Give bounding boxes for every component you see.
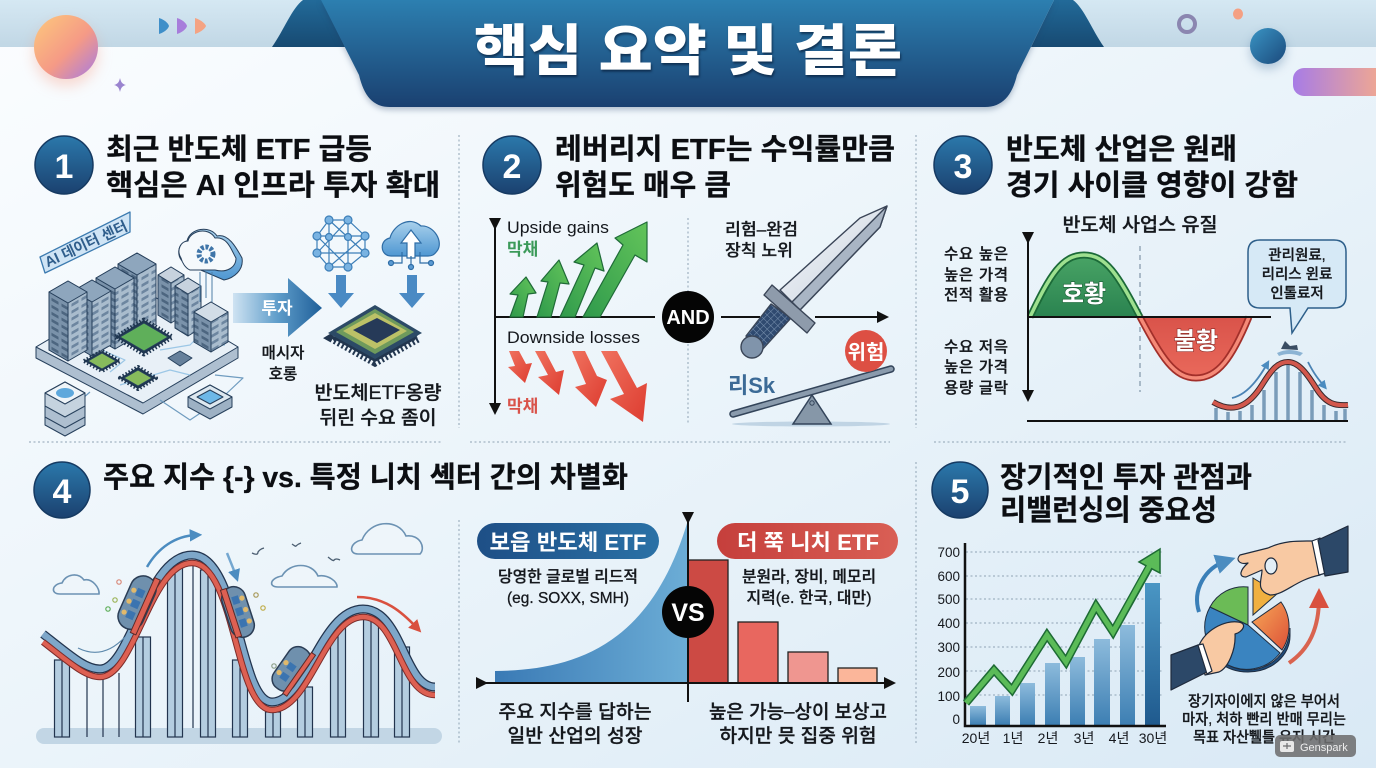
heading 1: 최근 반도체 ETF 급등 (106, 133, 372, 166)
number badge 3 (934, 136, 992, 194)
coaster car 3 (267, 641, 316, 696)
heading 1 (106, 133, 440, 202)
heading 3: 경기 사이클 영향이 강함 (1006, 169, 1298, 202)
heading 4: 주요 지수 {-} vs. 특정 니치 셱터 간의 차별화 (103, 461, 628, 494)
risk seesaw: 위험 (848, 341, 884, 364)
demand labels: 전적 활용 (944, 286, 1008, 304)
invest arrow (233, 278, 322, 337)
watermark badge: Genspark (1300, 742, 1348, 754)
rebalance caption (1182, 693, 1346, 746)
heading 3 (1006, 133, 1298, 202)
label: upside 막채: 막채 (507, 240, 538, 259)
demand labels: 수요 높은 (944, 245, 1008, 263)
x axis labels: 1년 (1003, 730, 1023, 746)
data center illustration (36, 212, 243, 436)
callout bubble: 관리원료, (1268, 247, 1326, 264)
caption: chip demand: 반도체ETF옹량 (314, 382, 442, 404)
label: downside losses: Downside losses (507, 328, 640, 347)
axes (965, 543, 1166, 726)
left summary: 주요 지수를 답하는 (498, 701, 652, 723)
blue pill label (477, 523, 659, 559)
x axis labels: 30년 (1139, 730, 1167, 746)
caption: chip demand: 뒤린 수요 좀이 (320, 407, 436, 429)
y axis labels: 400 (937, 616, 960, 631)
x axis labels (962, 730, 1167, 746)
decorative sparkle (114, 78, 126, 92)
confetti dots (106, 580, 276, 668)
VS badge (662, 586, 714, 638)
number badge 5 (932, 462, 988, 518)
y axis labels: 500 (937, 592, 960, 607)
semiconductor chip (328, 305, 422, 362)
broad ETF description: 당영한 글로벌 리드적 (498, 568, 638, 586)
label: upside gains: Upside gains (507, 218, 609, 237)
decorative orb (34, 15, 98, 79)
title ribbon (272, 0, 1104, 107)
platform (36, 287, 238, 414)
supports (54, 563, 410, 737)
birds (252, 543, 340, 561)
niche ETF description (742, 568, 876, 607)
y axis labels: 700 (937, 545, 960, 560)
rebalance illustration (1171, 526, 1348, 746)
coaster track (43, 555, 435, 710)
slump area (1140, 317, 1251, 380)
risk seesaw: 리Sk (728, 373, 776, 398)
decorative drop (1233, 8, 1243, 20)
heading 2: 위험도 매우 큼 (555, 169, 731, 202)
boom area (1028, 253, 1140, 317)
red pill label (717, 523, 898, 559)
down arrows (328, 275, 425, 308)
red pill label: 더 쭉 니치 ETF (737, 530, 879, 555)
x axis labels: 20년 (962, 730, 990, 746)
left hand (1171, 622, 1244, 690)
axes (495, 226, 885, 411)
coaster car 1 (113, 570, 161, 635)
storage stack (45, 382, 85, 436)
caption: 매시자 호롱 (262, 344, 304, 383)
cloud upload icon (382, 221, 439, 270)
broad ETF description: (eg. SOXX, SMH) (507, 590, 629, 607)
y axis labels: 200 (937, 665, 960, 680)
y axis labels: 0 (952, 712, 960, 727)
panel 5: long term view (932, 461, 1348, 746)
niche bars (688, 560, 877, 683)
number badge 2 (483, 136, 541, 194)
chart axes (484, 520, 892, 702)
niche ETF description: 분원라, 장비, 메모리 (742, 568, 876, 586)
y axis labels: 600 (937, 569, 960, 584)
cycle chart (1027, 240, 1348, 421)
number badge 1: 1 (55, 148, 73, 186)
right summary (709, 701, 887, 747)
decorative blue ball (1250, 28, 1286, 64)
heading 5: 리밸런싱의 중요성 (1000, 494, 1217, 527)
right summary: 하지만 믓 집중 위험 (720, 725, 876, 747)
y axis labels: 300 (937, 640, 960, 655)
heading 5: 장기적인 투자 관점과 (1000, 461, 1252, 494)
rebalance caption: 마자, 처하 빤리 반매 무리는 (1182, 711, 1346, 728)
VS badge: VS (671, 599, 705, 627)
heading 2 (555, 133, 895, 202)
label: 리험-완검: 리험–완검 (725, 220, 798, 239)
callout bubble (1248, 240, 1346, 333)
ground shadow (36, 728, 442, 744)
blue pill label: 보읍 반도체 ETF (490, 530, 646, 555)
panel 4: index vs niche (34, 461, 898, 747)
panel 3: semiconductor cycle (934, 133, 1348, 421)
label: 리험-완검: 장칙 노위 (725, 241, 793, 260)
roller coaster (36, 524, 442, 744)
callout bubble: 리리스 윈료 (1262, 266, 1332, 283)
network box (188, 385, 232, 419)
caption: 매시자 호롱: 호롱 (269, 365, 297, 383)
demand labels (944, 245, 1008, 397)
growth curve (495, 520, 688, 683)
AND badge: AND (666, 307, 710, 329)
red down arrows (508, 351, 647, 422)
label: 리험-완검 (725, 220, 798, 260)
invest arrow: 투자 (261, 299, 293, 318)
clouds (53, 524, 422, 594)
caption: chip demand (314, 382, 442, 429)
left summary (498, 701, 652, 747)
growth chart (937, 543, 1167, 746)
rotation arrows (1197, 561, 1319, 663)
decorative gradient pill (1293, 68, 1376, 96)
number badge 5: 5 (951, 473, 969, 511)
number badge 2: 2 (503, 148, 521, 186)
header band (0, 0, 1376, 47)
panel 1: AI infrastructure (35, 133, 442, 436)
heading 3: 반도체 산업은 원래 (1006, 133, 1237, 166)
right summary: 높은 가능–상이 보상고 (709, 701, 887, 723)
title: 핵심 요약 및 결론 (474, 20, 902, 82)
decorative ring (1179, 16, 1195, 32)
left summary: 일반 산업의 성장 (508, 725, 642, 747)
heading 1: 핵심은 AI 인프라 투자 확대 (106, 169, 440, 202)
niche ETF description: 지력(e. 한국, 대만) (746, 589, 872, 607)
demand labels: 용량 글락 (944, 379, 1008, 397)
x axis labels: 4년 (1109, 730, 1129, 746)
section dividers (29, 135, 1346, 745)
decorative triangles (159, 18, 206, 34)
callout bubble: 인톨료저 (1270, 285, 1324, 302)
green chips (84, 320, 192, 389)
boom area: 호황 (1062, 281, 1106, 308)
chart title: 반도체 사업스 유질 (1062, 214, 1218, 236)
heading 2: 레버리지 ETF는 수익률만큼 (555, 133, 895, 166)
number badge 4 (34, 462, 90, 518)
coaster car 2 (219, 584, 257, 640)
connector lines (75, 375, 243, 420)
neural network icon (313, 216, 369, 271)
number badge 3: 3 (954, 148, 972, 186)
label: downside 막채: 막채 (507, 397, 538, 416)
demand labels: 높은 가격 (944, 266, 1008, 284)
server racks (49, 253, 228, 361)
green trend arrow (966, 549, 1160, 703)
heading 5 (1000, 461, 1252, 527)
panel 2: leverage risk (483, 133, 895, 426)
demand labels: 수요 저윽 (944, 338, 1008, 356)
caption: 매시자 호롱: 매시자 (262, 344, 304, 362)
pie chart (1205, 578, 1290, 672)
x axis labels: 3년 (1074, 730, 1094, 746)
x axis labels: 2년 (1038, 730, 1058, 746)
rebalance caption: 목표 자산쀌틀 유지 시간 (1193, 729, 1335, 746)
demand labels: 높은 가격 (944, 358, 1008, 376)
mini coaster (1213, 341, 1348, 420)
slump area: 불황 (1174, 328, 1218, 355)
number badge 1 (35, 136, 93, 194)
green up arrows (510, 222, 647, 317)
broad ETF description (498, 568, 638, 607)
center dashed line (687, 218, 689, 423)
sword (741, 206, 887, 358)
bars (970, 583, 1160, 725)
AND badge (662, 291, 714, 343)
risk seesaw (728, 330, 891, 426)
label: AI data center: AI 데이터 센터 (42, 218, 130, 271)
motion arrows (78, 535, 417, 652)
rebalance caption: 장기자이에지 않은 부어서 (1188, 693, 1340, 710)
right hand (1238, 526, 1348, 595)
comparison chart (477, 520, 898, 747)
watermark badge (1275, 735, 1356, 757)
number badge 4: 4 (53, 473, 72, 511)
y axis labels (937, 545, 960, 727)
gear cloud (179, 229, 242, 302)
y axis labels: 100 (937, 689, 960, 704)
